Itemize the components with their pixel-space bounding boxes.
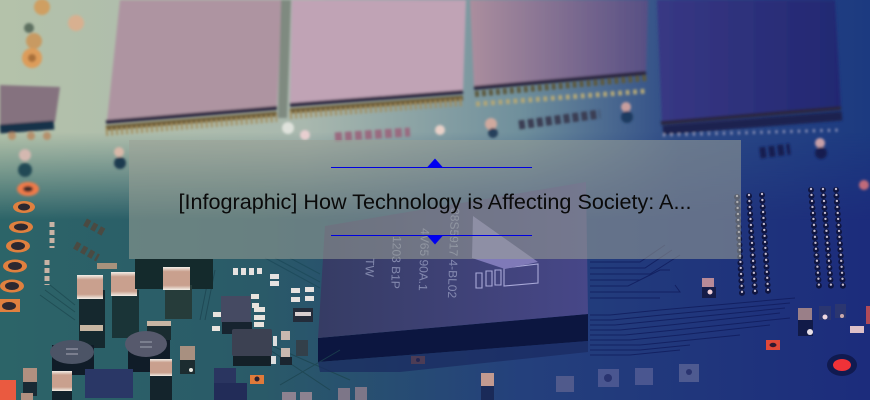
- top row of memory chips: [106, 0, 842, 135]
- top ornament: line with upward triangle: [331, 158, 532, 168]
- large processor chip: 38S5917 4-BL02: [445, 208, 462, 299]
- capacitors: [77, 259, 213, 348]
- bottom ornament: line with downward triangle: [331, 235, 532, 244]
- left column of orange rings: [0, 201, 117, 312]
- large processor chip: 4V65 90A.1: [416, 228, 432, 291]
- dark shadow below chip on board: [318, 341, 588, 372]
- circuit traces: [40, 245, 795, 390]
- large processor chip: TW: [362, 258, 377, 278]
- title text: [Infographic] How Technology is Affecting Society: A...: [179, 189, 691, 214]
- pads and components under top chips: [282, 102, 869, 190]
- centre surface mount chips: [212, 268, 425, 366]
- lower left components: [0, 346, 367, 400]
- inductors: [50, 331, 170, 375]
- ball grid array columns: [737, 189, 843, 293]
- large processor chip: 1203 B1P: [388, 236, 404, 289]
- bottom row of components: [481, 364, 699, 400]
- right side components and red LED: [702, 278, 870, 376]
- title panel: [129, 140, 741, 259]
- large processor chip: [318, 182, 588, 362]
- small chip top left and pads: [0, 0, 126, 196]
